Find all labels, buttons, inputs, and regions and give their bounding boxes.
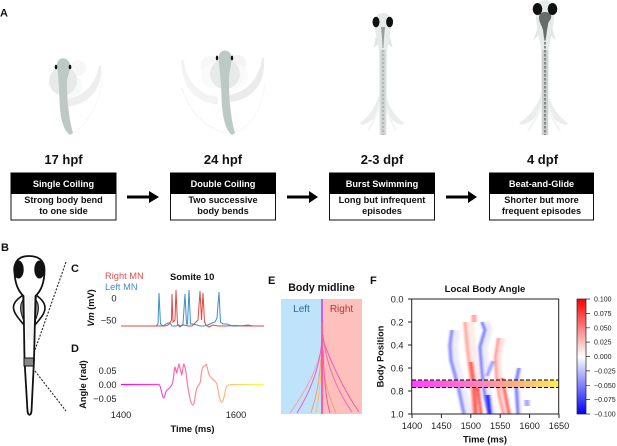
illustration: 17 hpf larva	[49, 58, 102, 135]
heatmap axes: 1.0	[391, 409, 404, 419]
heatmap axes: Body Position	[376, 325, 386, 387]
illustration: 4 dpf larva	[519, 0, 568, 135]
heatmap axes: 1450	[431, 421, 452, 431]
box: Beat-and-Glide: frequent episodes	[502, 206, 581, 216]
box: Double Coiling	[170, 172, 276, 220]
colorbar: −0.100	[594, 412, 616, 418]
arrow	[127, 191, 159, 203]
chart: membrane voltage traces: −50	[101, 316, 116, 326]
colorbar	[577, 296, 616, 418]
arrow	[446, 191, 477, 203]
panel label D: D	[71, 343, 79, 355]
heading: 17 hpf: 17 hpf	[44, 152, 83, 167]
chart: tail angle trace: 1600	[226, 410, 246, 420]
colorbar: 0.075	[594, 311, 612, 318]
panel label A: A	[0, 8, 8, 20]
colorbar: 0.100	[594, 296, 612, 304]
chart: membrane voltage traces: Vm (mV)	[86, 289, 96, 327]
box: Beat-and-Glide	[489, 172, 594, 220]
box: Burst Swimming	[329, 172, 435, 220]
colorbar: 0.050	[594, 325, 612, 332]
chart: tail angle trace: 1400	[111, 410, 131, 420]
heatmap axes: 0.8	[391, 386, 404, 396]
box: Burst Swimming: episodes	[362, 206, 402, 216]
legend: Right MN and Left MN: Left MN	[105, 282, 138, 292]
title: Local Body Angle: Local Body Angle	[445, 284, 525, 295]
chart: tail angle trace: Time (ms)	[170, 423, 215, 434]
panel label C: C	[71, 263, 79, 275]
heatmap axes: 1650	[549, 421, 569, 431]
chart: tail angle trace: −0.05	[93, 394, 116, 404]
chart: body midline: Left	[293, 304, 310, 315]
box: Beat-and-Glide: Shorter but more	[504, 195, 579, 205]
box: Double Coiling: Two successive	[188, 195, 258, 205]
colorbar: −0.050	[594, 383, 616, 390]
legend: Right MN and Left MN	[105, 271, 144, 292]
panel label F: F	[370, 275, 377, 287]
panel label B: B	[1, 242, 9, 254]
heatmap axes: Time (ms)	[463, 434, 507, 444]
illustration: 2-3 dpf larva	[360, 13, 404, 135]
chart: membrane voltage traces: 0	[111, 294, 116, 304]
title: Body midline: Body midline	[288, 282, 355, 294]
box: Burst Swimming: Long but infrequent	[339, 195, 425, 205]
chart: membrane voltage traces	[86, 289, 264, 327]
heatmap axes: 0.0	[391, 294, 404, 304]
chart: tail angle trace	[78, 360, 264, 434]
dashed zoom lines	[35, 262, 66, 411]
heatmap axes: 0.6	[391, 363, 404, 373]
box: Double Coiling: body bends	[197, 206, 249, 216]
chart: tail angle trace: Angle (rad)	[78, 360, 88, 409]
legend: Right MN and Left MN: Right MN	[105, 271, 144, 281]
chart: body midline: Right	[330, 304, 353, 315]
heatmap: local body angle	[450, 315, 527, 414]
box: Single Coiling: to one side	[39, 206, 88, 216]
panel label E: E	[268, 275, 275, 287]
box: Beat-and-Glide: Beat-and-Glide	[509, 179, 574, 189]
heatmap axes: 1500	[461, 421, 481, 431]
colorbar: 0.025	[594, 340, 612, 347]
heatmap axes: 1400	[402, 421, 422, 431]
box: Burst Swimming: Burst Swimming	[346, 179, 418, 189]
heatmap axes: 1550	[490, 421, 510, 431]
illustration: 24 hpf larva	[181, 50, 265, 135]
chart: body midline	[281, 299, 362, 414]
title: Somite 10: Somite 10	[170, 271, 214, 282]
heatmap axes: 1600	[519, 421, 540, 431]
heatmap axes	[376, 294, 569, 444]
illustration: larva outline with somite	[13, 256, 45, 415]
box: Double Coiling: Double Coiling	[191, 179, 255, 189]
heading: 4 dpf: 4 dpf	[527, 152, 559, 167]
highlighted posture band	[412, 380, 559, 388]
box: Single Coiling: Strong body bend	[24, 195, 103, 205]
arrow	[287, 191, 318, 203]
box: Single Coiling	[10, 172, 116, 220]
chart: tail angle trace: 0.00	[99, 380, 116, 390]
heading: 2-3 dpf: 2-3 dpf	[361, 152, 404, 167]
colorbar: −0.025	[594, 368, 616, 375]
colorbar: 0.000	[594, 354, 612, 361]
heatmap axes: 0.2	[391, 317, 404, 327]
chart: tail angle trace: 0.05	[99, 366, 116, 376]
heatmap axes: 0.4	[391, 340, 404, 350]
colorbar: −0.075	[594, 397, 616, 404]
box: Single Coiling: Single Coiling	[33, 179, 94, 189]
heading: 24 hpf: 24 hpf	[204, 152, 243, 167]
